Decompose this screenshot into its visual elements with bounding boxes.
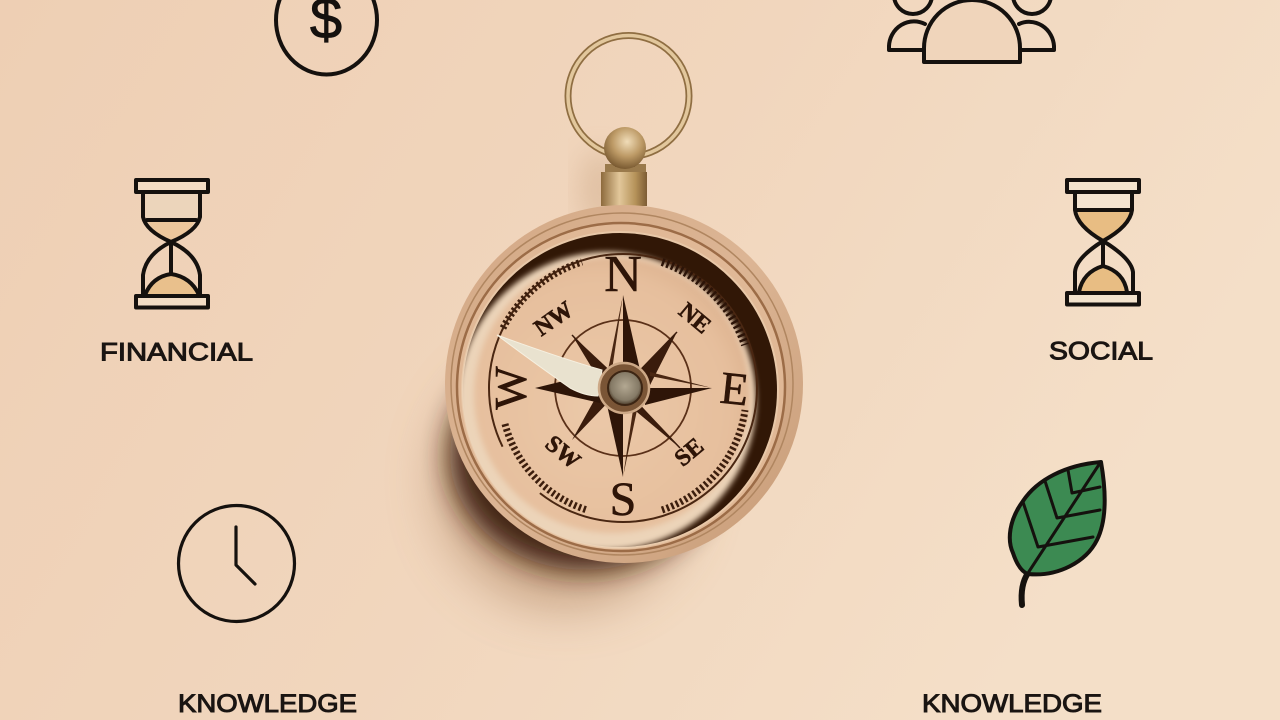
label: financial: FINANCIAL (100, 338, 253, 366)
icon: leaf (1010, 462, 1105, 605)
cardinal letters (485, 246, 751, 526)
label: social: SOCIAL (1049, 338, 1153, 366)
cardinal letters: W (485, 366, 536, 410)
icon: dollar coin (276, 0, 377, 74)
compass needle (497, 335, 602, 396)
compass hub (599, 363, 649, 413)
cardinal letters: SW (540, 431, 585, 475)
cardinal letters: S (610, 473, 636, 526)
icon: clock (178, 506, 294, 622)
tick marks (503, 262, 745, 510)
compass case (445, 205, 803, 563)
compass ring (568, 36, 689, 156)
cardinal letters: NW (530, 297, 578, 342)
icon: group of people (889, 0, 1054, 62)
compass collar and ball (601, 127, 647, 206)
label: knowledge right: KNOWLEDGE (922, 690, 1102, 718)
cardinal letters: NE (673, 298, 716, 339)
icon: hourglass right (1067, 180, 1139, 304)
compass drop shadow (440, 150, 720, 605)
cardinal letters: SE (670, 433, 709, 472)
cardinal letters: N (604, 246, 642, 303)
compass rose (535, 295, 712, 477)
cardinal letters: E (718, 362, 751, 415)
compass (440, 36, 803, 605)
compass face (458, 252, 757, 550)
label: knowledge left: KNOWLEDGE (178, 690, 357, 718)
icon: hourglass left (136, 180, 208, 308)
